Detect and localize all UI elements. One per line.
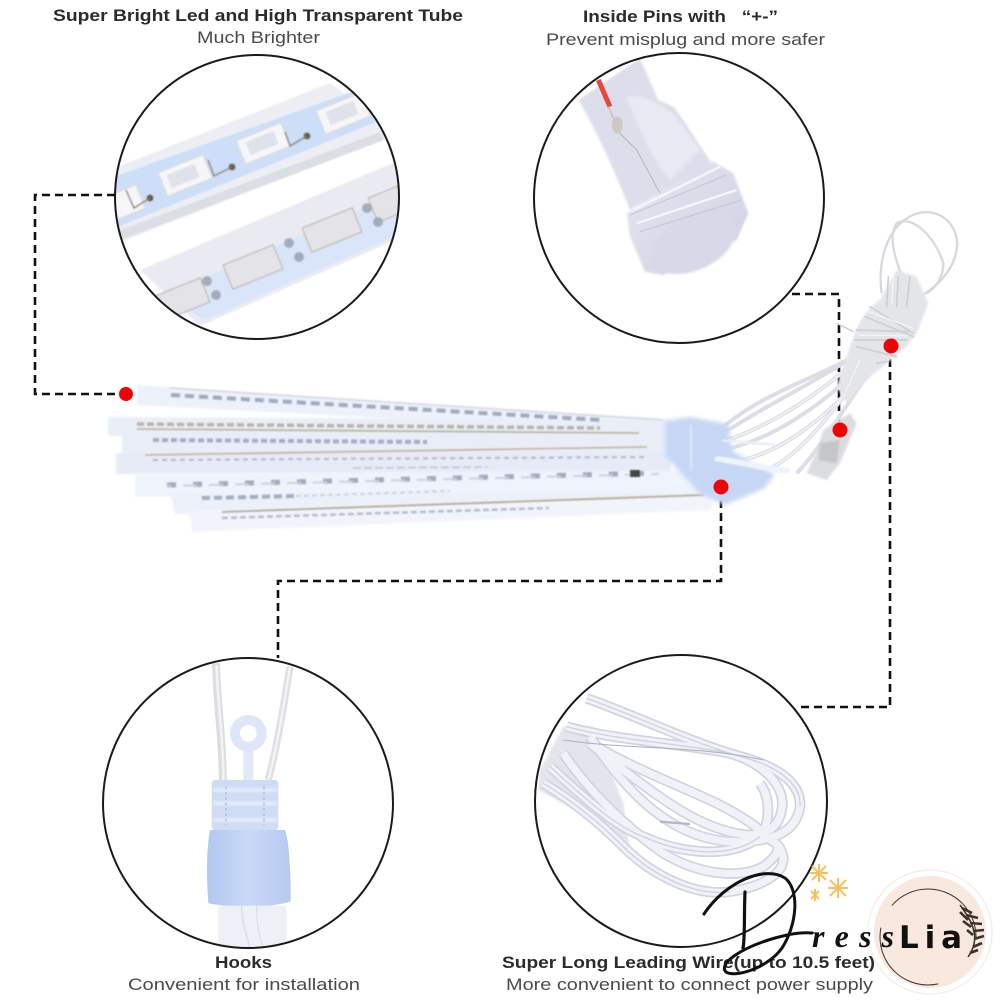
lower tube body: [140, 160, 400, 326]
heading: inside pins feature: [546, 7, 825, 49]
upper tube body: [118, 83, 385, 241]
bundle wires: [723, 357, 853, 433]
red marker: plug: [832, 422, 848, 438]
tube below: [218, 906, 287, 949]
logo disc: [868, 870, 992, 994]
red wire: [598, 80, 610, 107]
plug neck: [578, 58, 712, 210]
upper collar: [212, 780, 278, 830]
red marker: tube: [119, 387, 133, 401]
heading: inside pins feature: Inside Pins with “+-”: [583, 7, 778, 26]
heading: hooks feature: [128, 953, 360, 994]
red marker: hook: [714, 480, 728, 494]
hook ring: [243, 748, 253, 782]
threaded cap: [627, 162, 748, 275]
heading: tube feature: Super Bright Led and High Transparent Tube: [53, 6, 463, 25]
illustration: blue tube connectors: [665, 417, 790, 505]
left wires: [216, 663, 223, 780]
connector: dashed line from wire knot to wire circle: [797, 346, 890, 707]
script letters ress: ress: [812, 918, 894, 954]
panel: hook close-up circle: [103, 658, 393, 949]
lower sleeve: [207, 830, 291, 907]
wire loops: [881, 212, 957, 297]
LED chips on upper tube: [116, 94, 371, 220]
LED chips on lower tube: [156, 185, 398, 316]
red marker: wire knot: [884, 338, 898, 354]
heading: tube feature: [53, 6, 463, 47]
heading: tube feature: Much Brighter: [197, 28, 320, 47]
plug: [807, 413, 857, 480]
heading: inside pins feature: Prevent misplug and more safer: [546, 30, 825, 49]
logo: DressLia watermark: [704, 864, 992, 994]
heading: hooks feature: Hooks: [215, 953, 272, 972]
LED rows and copper strips: [137, 388, 704, 518]
brand letters Lia: Lia: [899, 920, 962, 956]
logo leaf: [960, 905, 984, 957]
connector: dashed line from hook to hooks circle: [278, 487, 721, 658]
panel: connector plug close-up circle: [534, 53, 824, 343]
heading: long wire feature: More convenient to connect power supply: [506, 975, 874, 994]
knot: [837, 270, 928, 403]
panel: long wire close-up circle: [535, 655, 827, 947]
illustration: bundle of meteor tubes: [108, 385, 712, 532]
connector: dashed line from plug circle to plug: [792, 294, 839, 430]
right wires: [268, 667, 290, 780]
panel: LED tube close-up circle: [114, 54, 400, 340]
script letter D: [704, 874, 812, 974]
illustration: wires, plug and knot: [720, 212, 957, 480]
logo stars: [810, 864, 848, 901]
heading: long wire feature: Super Long Leading Wire(up to 10.5 feet): [502, 953, 875, 972]
heading: long wire feature: [502, 953, 875, 994]
connector: dashed line from tube circle to tube end: [35, 195, 118, 394]
heading: hooks feature: Convenient for installation: [128, 975, 360, 994]
